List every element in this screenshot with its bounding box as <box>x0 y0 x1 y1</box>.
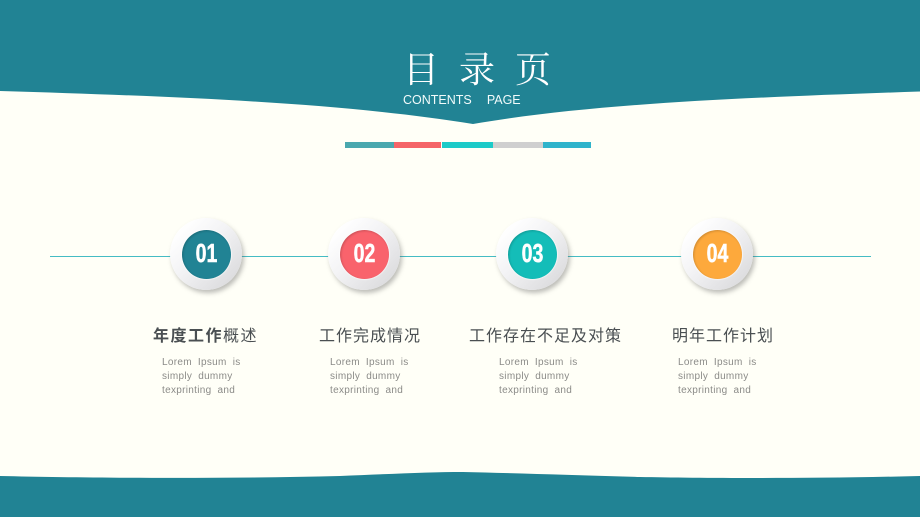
text 3: Lorem Ipsum is <box>499 357 578 368</box>
disc 01: 01 <box>196 238 217 268</box>
disc 02: 02 <box>354 238 375 268</box>
node 03 <box>496 218 568 290</box>
heading 4: 明年工作计划 <box>672 328 774 345</box>
text 3: texprinting and <box>499 385 572 396</box>
text 1: Lorem Ipsum is <box>162 357 241 368</box>
disc 03: 03 <box>522 238 543 268</box>
text 2: texprinting and <box>330 385 403 396</box>
text 4: texprinting and <box>678 385 751 396</box>
disc 04: 04 <box>707 238 728 268</box>
heading 1: 年度工作概述 <box>153 328 258 345</box>
text 4 <box>678 357 757 396</box>
colour bar <box>345 142 591 148</box>
disc 02 <box>340 230 389 279</box>
text 2 <box>330 357 409 396</box>
heading 3: 工作存在不足及对策 <box>469 328 622 345</box>
bottom banner <box>0 472 920 517</box>
disc 04 <box>693 230 742 279</box>
text 1: simply dummy <box>162 371 232 382</box>
text 3 <box>499 357 578 396</box>
text 2: Lorem Ipsum is <box>330 357 409 368</box>
subtitle: CONTENTS PAGE <box>403 93 521 107</box>
text 4: simply dummy <box>678 371 748 382</box>
top banner <box>0 0 920 124</box>
disc 03 <box>508 230 557 279</box>
heading 2: 工作完成情况 <box>319 328 421 345</box>
timeline line <box>50 256 871 257</box>
text 1 <box>162 357 241 396</box>
node 01 <box>170 218 242 290</box>
text 1: texprinting and <box>162 385 235 396</box>
node 02 <box>328 218 400 290</box>
title: 目录页 <box>403 50 571 90</box>
text 2: simply dummy <box>330 371 400 382</box>
text 4: Lorem Ipsum is <box>678 357 757 368</box>
node 04 <box>681 218 753 290</box>
disc 01 <box>182 230 231 279</box>
text 3: simply dummy <box>499 371 570 382</box>
